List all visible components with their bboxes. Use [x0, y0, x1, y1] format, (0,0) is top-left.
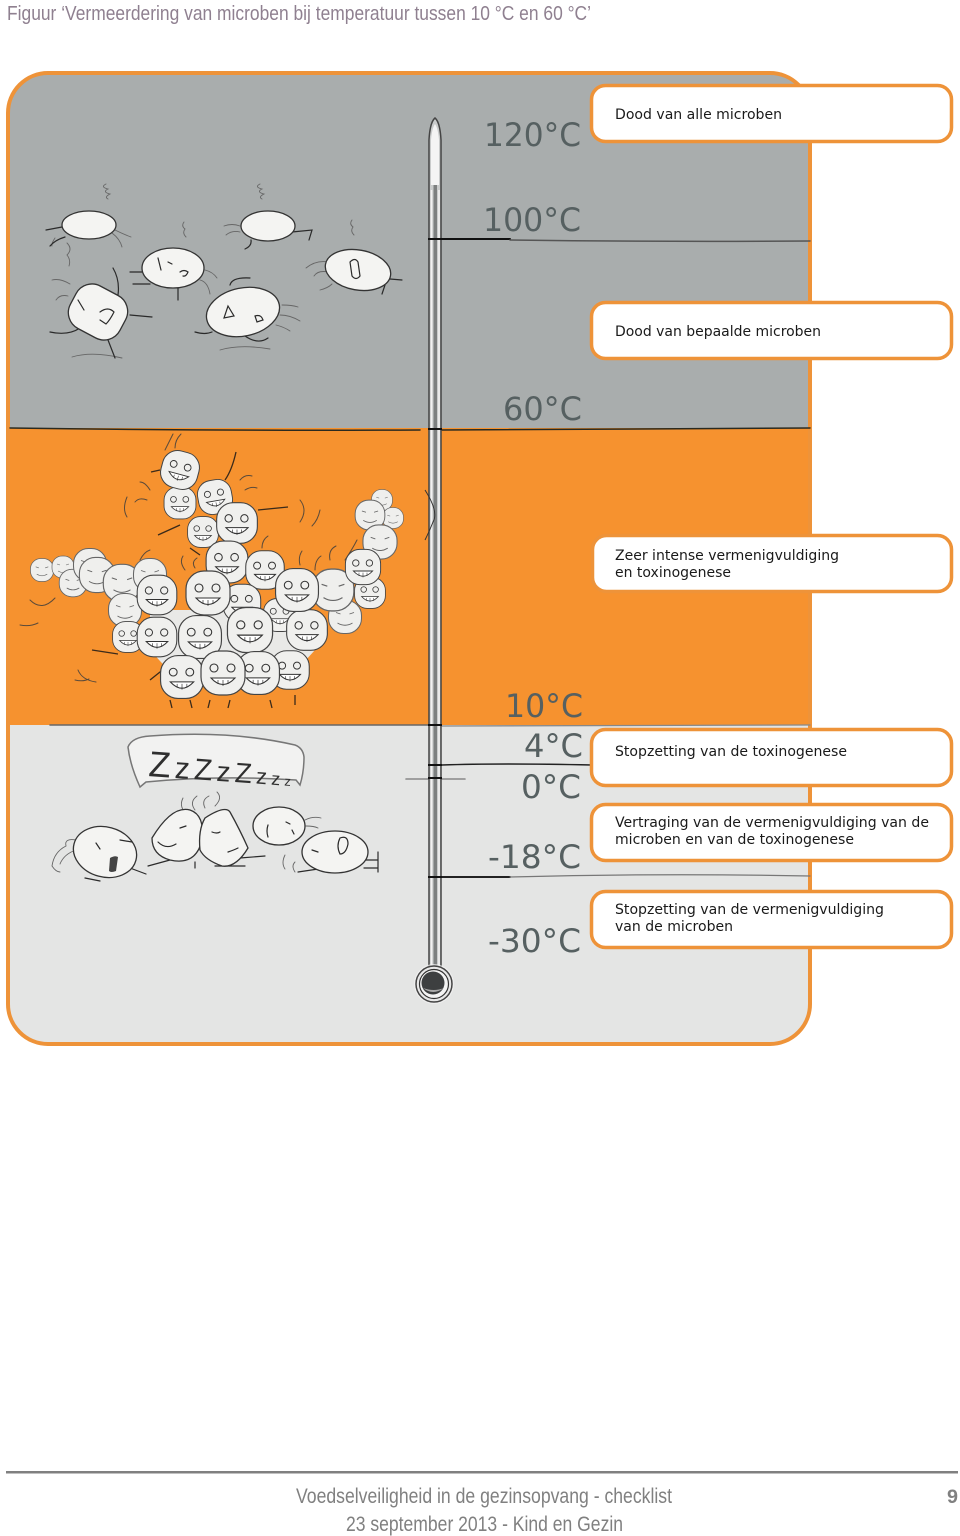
- zone: cold light band: [6, 725, 812, 1045]
- illustration: sleeping microbes: [52, 734, 378, 884]
- footer rule: [6, 1471, 958, 1474]
- temperature scale labels: [483, 116, 583, 960]
- label: 10: 10°C: [505, 687, 583, 725]
- heads: [30, 558, 54, 582]
- callout: 120: [592, 86, 952, 142]
- panel border: [8, 73, 810, 1044]
- illustration: dead microbes: [46, 184, 402, 358]
- sleeper 4: [253, 807, 321, 872]
- sleeper 2: [148, 792, 220, 868]
- label: 60: 60°C: [503, 390, 582, 428]
- callout: -18: Stopzetting van de vermenigvuldiging: [615, 902, 884, 918]
- microbe 4: [306, 220, 402, 295]
- microbe 5: [50, 268, 152, 358]
- page number: 9: [947, 1487, 958, 1508]
- label: 120: 120°C: [484, 116, 581, 154]
- callout: 60-10: Zeer intense vermenigvuldiging: [615, 548, 839, 564]
- label: -18: -18°C: [488, 838, 581, 876]
- zone: orange growth band: [6, 428, 812, 725]
- footer text: 23 september 2013 - Kind en Gezin: [346, 1513, 623, 1536]
- snore text: ZzZzZzzz: [147, 743, 293, 794]
- microbe 2: [224, 184, 312, 249]
- callout: 60-10: [592, 536, 952, 592]
- label: -30: -30°C: [488, 922, 581, 960]
- callout: -18: van de microben: [615, 919, 733, 935]
- callout: 4: [592, 730, 952, 786]
- sleeper 1: [52, 820, 146, 884]
- label: 4: 4°C: [524, 727, 583, 765]
- label: 0: 0°C: [521, 768, 581, 806]
- footer text: [296, 1485, 672, 1536]
- microbe 3: [130, 222, 217, 300]
- thermometer: [414, 118, 454, 1004]
- sleeper 5: [298, 831, 378, 873]
- callout: 0: [592, 804, 952, 860]
- microbe 6: [195, 278, 300, 350]
- callout: -18: [592, 892, 952, 948]
- label: 100: 100°C: [483, 201, 581, 239]
- hair and arms: [92, 452, 295, 708]
- title: Figuur ‘Vermeerdering van microben bij temperatuur tussen 10 °C en 60 °C’: [7, 3, 591, 25]
- callout: 0: Vertraging van de vermenigvuldiging van de: [615, 815, 929, 831]
- cluster base: [150, 610, 315, 672]
- footer text: Voedselveiligheid in de gezinsopvang - checklist: [296, 1485, 672, 1508]
- microbe 1: [46, 184, 131, 266]
- zone: hot grey band: [6, 71, 812, 428]
- callout: 120: Dood van alle microben: [615, 107, 782, 123]
- illustration: multiplying microbes: [20, 434, 435, 708]
- callout: 100: [592, 302, 952, 358]
- callout: 100: Dood van bepaalde microben: [615, 324, 821, 340]
- panel: temperature zones: [6, 71, 812, 1045]
- sleeper 3: [200, 810, 265, 866]
- temperature divider lines: [10, 239, 810, 877]
- speech bubble: [128, 734, 304, 794]
- callout: 4: Stopzetting van de toxinogenese: [615, 744, 847, 760]
- callout: 60-10: en toxinogenese: [615, 565, 731, 581]
- callout: 0: microben en van de toxinogenese: [615, 832, 854, 848]
